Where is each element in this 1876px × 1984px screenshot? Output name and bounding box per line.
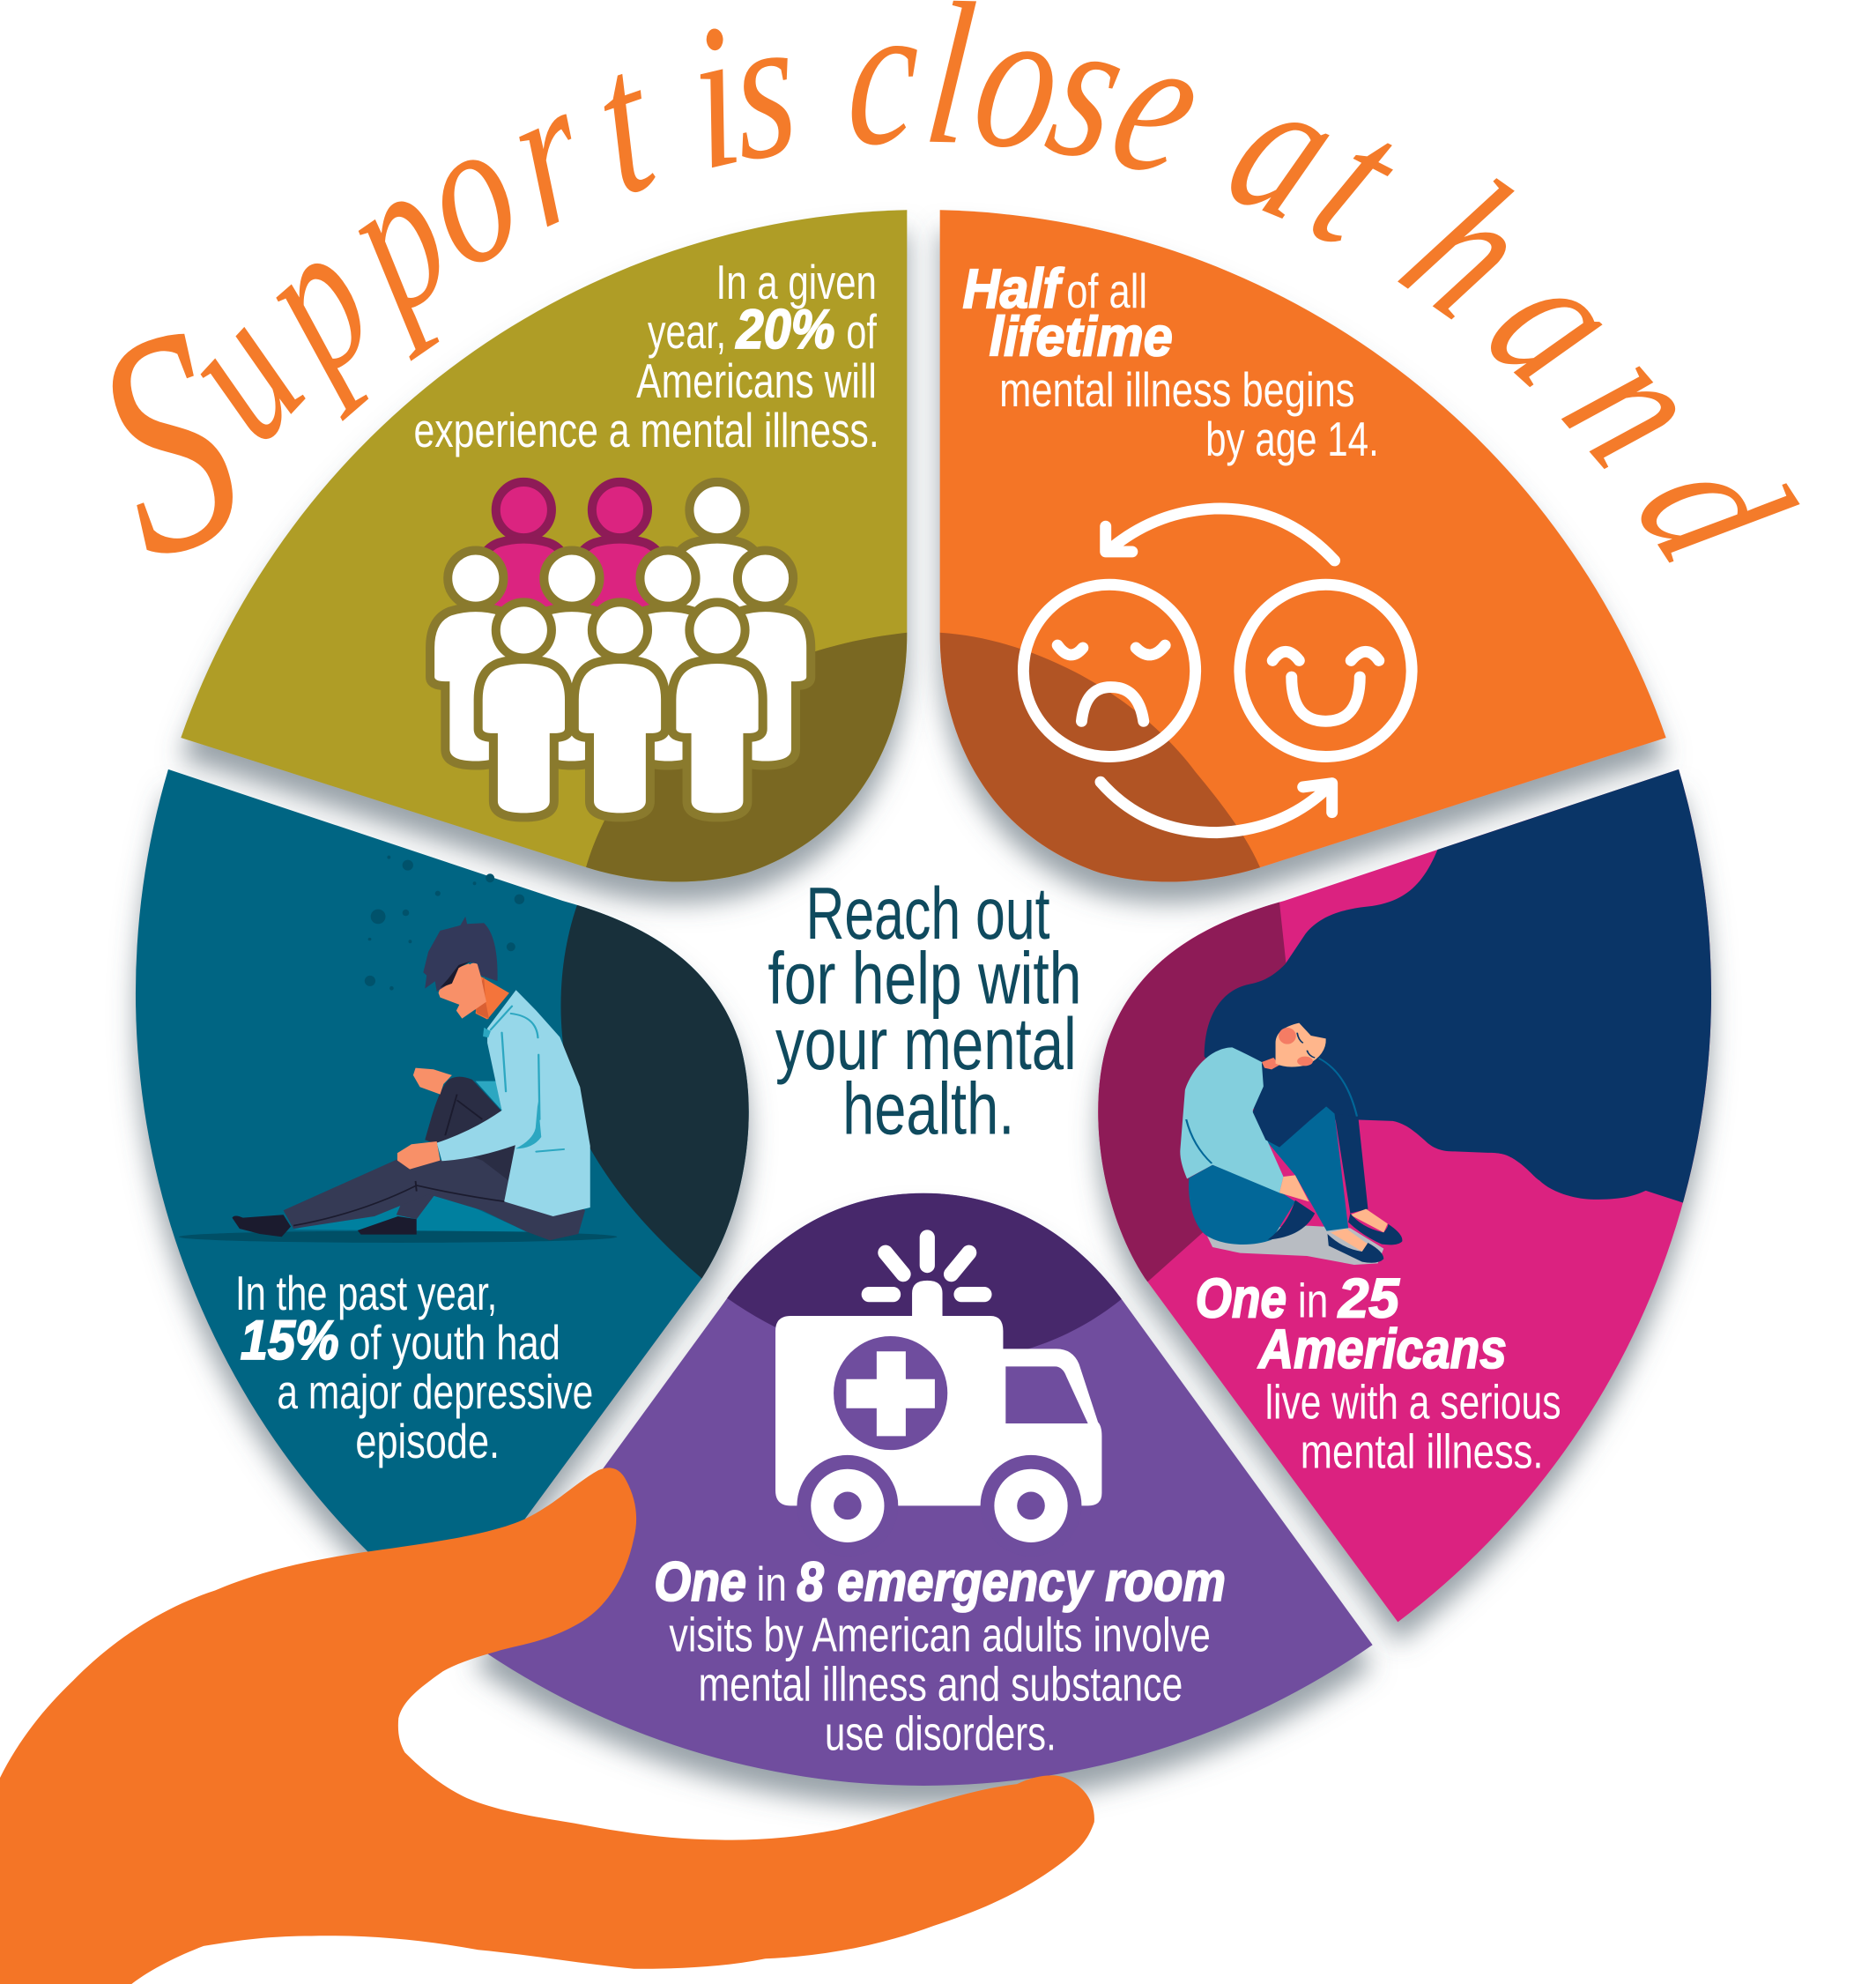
title: t xyxy=(1279,73,1440,287)
title: S xyxy=(53,260,280,626)
statistic text xyxy=(654,1551,1226,1760)
panel: one in 25 Americans xyxy=(1075,747,1733,1622)
navy hair xyxy=(1205,747,1733,1205)
statistic text: experience a mental illness. xyxy=(413,404,879,457)
panel: half of lifetime mental illness xyxy=(911,210,1666,911)
panel: 15 percent of youth xyxy=(136,769,784,1622)
statistic text: 8 emergency room xyxy=(797,1551,1226,1613)
statistic text: One xyxy=(654,1551,746,1613)
statistic text: episode. xyxy=(355,1415,500,1468)
statistic text: by age 14. xyxy=(1205,412,1379,466)
title: n xyxy=(1522,308,1756,501)
purple shaded area xyxy=(727,1193,1122,1349)
statistic text: Americans will xyxy=(636,354,877,408)
pink shaded area xyxy=(1098,903,1287,1282)
statistic text: use disorders. xyxy=(825,1706,1057,1760)
statistic text: live with a serious xyxy=(1265,1375,1561,1429)
title: a xyxy=(1198,30,1375,262)
statistic text: mental illness begins xyxy=(999,363,1355,417)
statistic text: 20% xyxy=(736,299,834,360)
statistic text: mental illness and substance xyxy=(698,1657,1183,1711)
center message: Reach out xyxy=(805,873,1050,955)
illustration: seated man xyxy=(179,856,617,1243)
statistic text: 15% xyxy=(241,1310,339,1371)
panel: one in 8 emergency room visits xyxy=(474,1177,1373,1786)
statistic text: of youth had xyxy=(349,1316,560,1370)
statistic text: year, xyxy=(648,305,726,359)
olive shaded area xyxy=(586,633,908,881)
panel: 20 percent of Americans xyxy=(181,210,936,911)
bubbles xyxy=(365,856,524,991)
title: h xyxy=(1364,138,1575,358)
center message: your mental xyxy=(775,1003,1077,1085)
title: a xyxy=(1447,216,1671,424)
statistic text: in xyxy=(756,1557,787,1611)
statistic text: mental illness. xyxy=(1301,1424,1543,1478)
statistic text xyxy=(962,258,1379,466)
title: o xyxy=(385,69,549,314)
statistic text xyxy=(1196,1267,1561,1478)
orange shaded area xyxy=(939,633,1260,881)
title xyxy=(53,0,1836,626)
statistic text: lifetime xyxy=(990,306,1173,368)
icon: ambulance xyxy=(775,1237,1101,1557)
icon: sad and happy faces with cycle arrows xyxy=(1023,509,1412,833)
title: t xyxy=(575,4,675,240)
statistic text: Americans xyxy=(1257,1319,1507,1380)
statistic text: of all xyxy=(1066,264,1147,318)
statistic text: In a given xyxy=(716,256,877,309)
title: p xyxy=(298,115,484,362)
statistic text: Half xyxy=(962,258,1065,320)
statistic text: In the past year, xyxy=(235,1267,497,1320)
teal shaded area xyxy=(560,904,749,1278)
title: u xyxy=(135,257,342,482)
title: p xyxy=(209,182,410,422)
statistic text: One xyxy=(1196,1267,1287,1329)
center message: for help with xyxy=(767,937,1081,1019)
statistic text: of xyxy=(846,305,878,359)
statistic text xyxy=(413,256,879,457)
icon: crowd of people xyxy=(430,482,811,817)
statistic text: in xyxy=(1298,1274,1328,1327)
illustration: seated woman xyxy=(1180,1023,1402,1265)
title: d xyxy=(1593,419,1836,593)
statistic text: visits by American adults involve xyxy=(669,1608,1211,1661)
statistic text xyxy=(235,1267,593,1468)
statistic text: 25 xyxy=(1338,1267,1400,1329)
center message xyxy=(767,873,1081,1149)
center message: health. xyxy=(842,1067,1014,1149)
title: r xyxy=(481,32,613,271)
illustration: supporting hand xyxy=(0,1468,1094,1984)
statistic text: a major depressive xyxy=(277,1365,593,1419)
